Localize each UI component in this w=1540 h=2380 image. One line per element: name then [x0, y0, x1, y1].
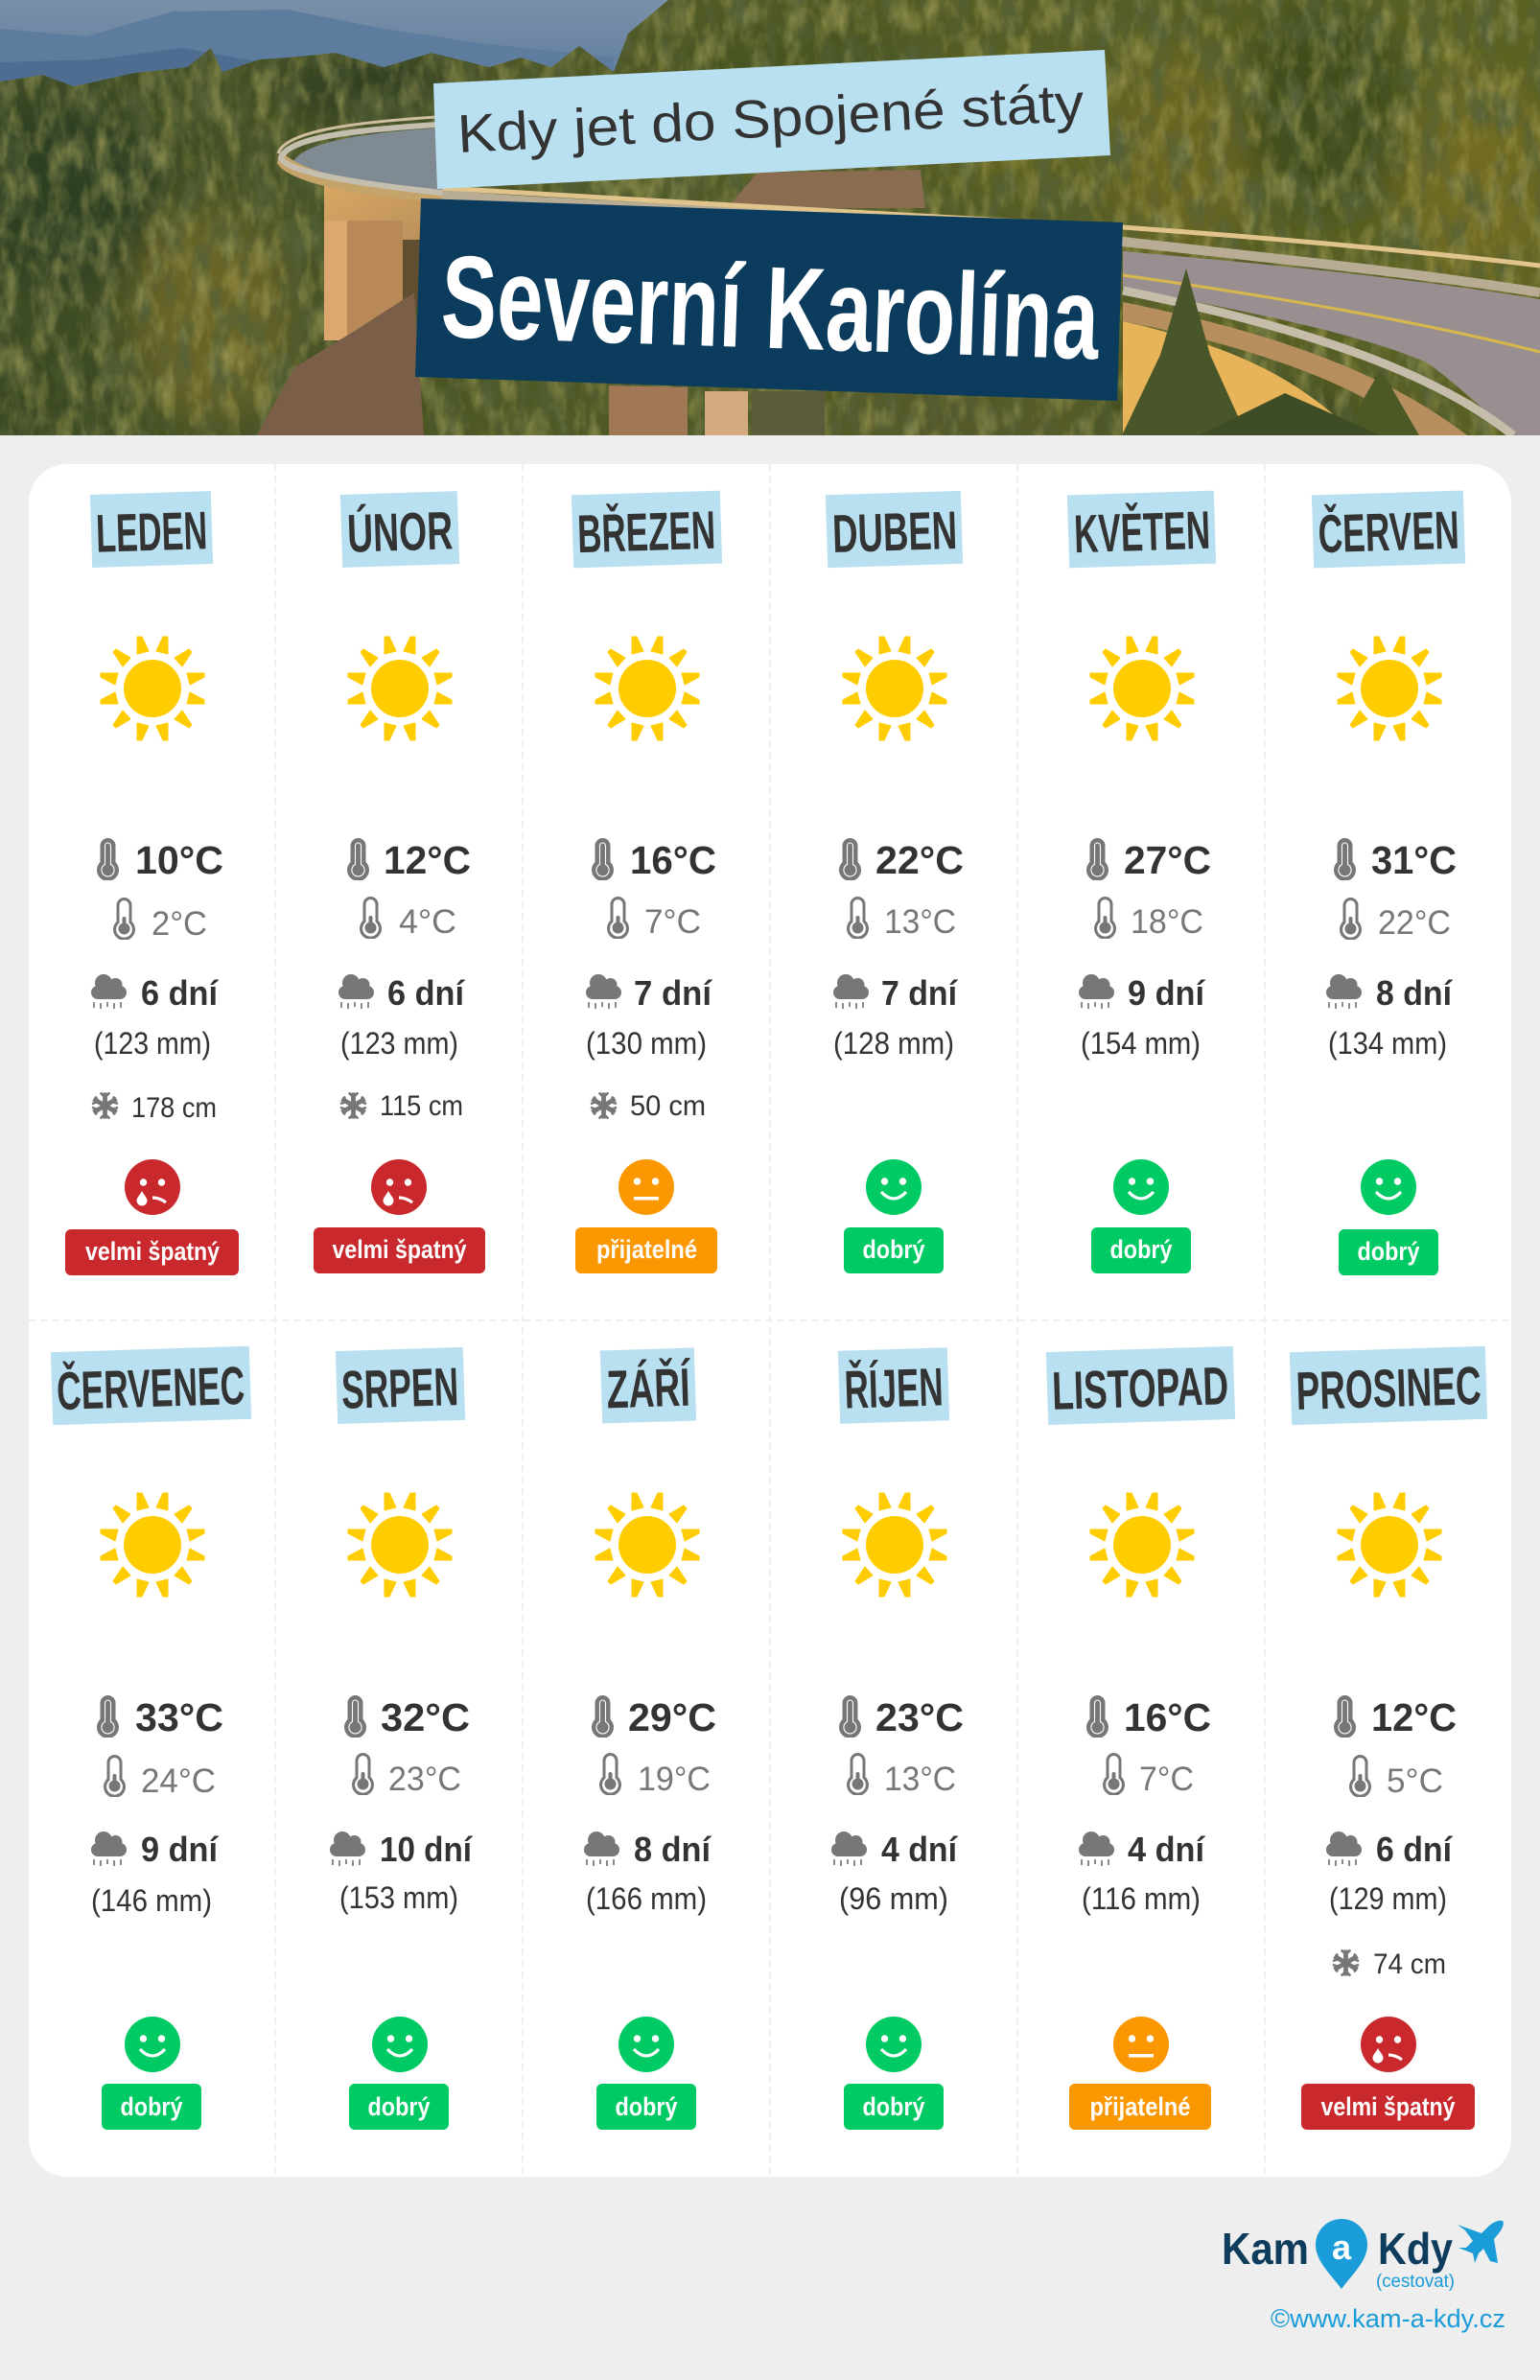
- header photo: road viaduct in forested mountains: [0, 0, 1540, 470]
- low temperature: [847, 897, 956, 941]
- precipitation: (130 mm): [586, 1026, 707, 1061]
- high temperature: 16°C: [1124, 1695, 1211, 1739]
- month: Březen: [572, 491, 722, 1273]
- rain days: [338, 973, 465, 1013]
- snow: 178 cm: [131, 1092, 217, 1124]
- rating badge: [575, 1227, 717, 1273]
- rain days: 6 dní: [141, 973, 219, 1013]
- rating badge: velmi špatný: [332, 1235, 466, 1264]
- high temperature: 12°C: [384, 838, 471, 882]
- panel: calendar card: [29, 464, 1511, 2177]
- precipitation: (129 mm): [1329, 1881, 1447, 1916]
- rain days: 6 dní: [387, 973, 465, 1013]
- rating badge: dobrý: [616, 2092, 677, 2121]
- rain days: 9 dní: [1128, 973, 1205, 1013]
- rating badge: velmi špatný: [1321, 2092, 1456, 2121]
- low temperature: [113, 898, 207, 943]
- month: Duben: [826, 491, 964, 1273]
- low temperature: [1340, 898, 1451, 942]
- month label: [340, 491, 459, 568]
- high temperature: 10°C: [135, 838, 223, 882]
- high temperature: 31°C: [1371, 838, 1457, 882]
- low temperature: 7°C: [644, 903, 701, 941]
- precipitation: (146 mm): [91, 1883, 212, 1918]
- high temperature: 33°C: [135, 1695, 223, 1739]
- icon: sun: [595, 1493, 699, 1597]
- subtitle banner: Kdy jet do Spojené státy: [455, 72, 1085, 164]
- high temperature: [1334, 1695, 1457, 1739]
- lower rail and bridge wall: [1123, 321, 1334, 433]
- precipitation: (123 mm): [340, 1026, 458, 1061]
- road surface right: [1123, 251, 1540, 435]
- high temperature: [97, 838, 223, 882]
- high temperature: [1086, 1695, 1211, 1739]
- rating badge: dobrý: [368, 2092, 430, 2121]
- rating face: [866, 2017, 922, 2072]
- rating badge: [1069, 2084, 1211, 2130]
- snow: [340, 1090, 463, 1122]
- month label: [336, 1347, 465, 1424]
- month label: LEDEN: [95, 500, 208, 564]
- rain days: [833, 973, 958, 1013]
- high temperature: [97, 1695, 223, 1739]
- rain days: 7 dní: [634, 973, 712, 1013]
- low temperature: [360, 897, 456, 941]
- month label: [1046, 1346, 1235, 1425]
- month: Únor: [314, 491, 485, 1273]
- low temperature: [599, 1753, 711, 1798]
- rating badge: [314, 1227, 485, 1273]
- icon: sun: [843, 637, 946, 740]
- rating badge: [844, 2084, 944, 2130]
- foreground trees: [1122, 268, 1247, 435]
- precipitation: (128 mm): [833, 1026, 954, 1061]
- rain days: 10 dní: [380, 1830, 473, 1869]
- icon: sun: [1338, 1493, 1441, 1597]
- low temperature: [104, 1755, 216, 1800]
- rating face: [371, 1159, 427, 1215]
- rain days: [831, 1830, 958, 1869]
- precipitation: (154 mm): [1081, 1026, 1201, 1061]
- month label: [1067, 491, 1216, 568]
- icon: sun: [348, 1493, 452, 1597]
- month: Říjen: [831, 1347, 964, 2130]
- icon: map pin: a: [1332, 2228, 1352, 2267]
- month label: [838, 1347, 949, 1424]
- icon: sun: [595, 637, 699, 740]
- icon: sun: [101, 1493, 204, 1597]
- title banner: Severní Karolína: [439, 231, 1102, 384]
- month label: KVĚTEN: [1073, 500, 1211, 564]
- low temperature: 5°C: [1387, 1762, 1443, 1800]
- icon: sun: [101, 637, 204, 740]
- snow: 74 cm: [1373, 1948, 1446, 1980]
- month label: LISTOPAD: [1051, 1355, 1229, 1421]
- road far left loop: [293, 128, 442, 190]
- rain days: 8 dní: [634, 1830, 712, 1869]
- rain days: 4 dní: [1128, 1830, 1205, 1869]
- rating face: [866, 1159, 922, 1215]
- title banner: [415, 198, 1123, 401]
- high temperature: 22°C: [875, 838, 964, 882]
- logo: Kam a Kdy: (cestovat): [1376, 2272, 1455, 2292]
- rain days: 8 dní: [1376, 973, 1453, 1013]
- precipitation: (134 mm): [1328, 1026, 1447, 1061]
- low temperature: 22°C: [1378, 904, 1451, 942]
- rock behind: [727, 170, 925, 208]
- month label: ŘÍJEN: [844, 1356, 945, 1420]
- high temperature: 32°C: [381, 1695, 470, 1739]
- month label: ČERVEN: [1318, 500, 1460, 564]
- month label: [826, 491, 963, 568]
- rating badge: přijatelné: [1089, 2092, 1191, 2121]
- icon: map pin: [1316, 2219, 1367, 2289]
- rating face: [372, 2017, 428, 2072]
- rating badge: velmi špatný: [85, 1237, 220, 1266]
- rating face: [618, 1159, 674, 1215]
- month: Srpen: [330, 1347, 473, 2130]
- rating badge: dobrý: [1358, 1237, 1419, 1266]
- month label: ÚNOR: [346, 500, 454, 564]
- low temperature: [352, 1753, 461, 1798]
- rain days: [584, 1830, 712, 1869]
- precipitation: (166 mm): [586, 1881, 707, 1916]
- month: Květen: [1067, 491, 1216, 1273]
- month: Září: [584, 1347, 716, 2130]
- rating badge: dobrý: [121, 2092, 182, 2121]
- high temperature: 27°C: [1124, 838, 1211, 882]
- low temperature: [1094, 897, 1203, 941]
- snow: 50 cm: [630, 1090, 706, 1122]
- high temperature: 23°C: [875, 1695, 964, 1739]
- rock cliff: [257, 292, 424, 435]
- high temperature: 16°C: [630, 838, 716, 882]
- high temperature: [1086, 838, 1211, 882]
- icon: plane: [1458, 2221, 1504, 2263]
- long rail behind boxes: [442, 195, 1540, 292]
- website url: ©www.kam-a-kdy.cz: [1271, 2304, 1505, 2333]
- rain days: [1326, 973, 1453, 1013]
- rain days: [1326, 1830, 1453, 1869]
- month label: SRPEN: [340, 1356, 459, 1420]
- rain days: [586, 973, 712, 1013]
- rain days: 7 dní: [881, 973, 958, 1013]
- high temperature: [1334, 838, 1457, 882]
- rating badge: [102, 2084, 201, 2130]
- month label: [600, 1347, 696, 1424]
- icon: sun: [348, 637, 452, 740]
- month: Červenec: [51, 1346, 251, 2130]
- rating face: [125, 2017, 180, 2072]
- low temperature: 19°C: [638, 1761, 711, 1798]
- low temperature: 23°C: [388, 1761, 461, 1798]
- rating badge: [1339, 1229, 1438, 1275]
- rain days: 6 dní: [1376, 1830, 1453, 1869]
- month label: [1290, 1346, 1487, 1425]
- precipitation: (153 mm): [339, 1880, 458, 1915]
- rain days: [1079, 973, 1205, 1013]
- rating badge: dobrý: [1110, 1235, 1172, 1264]
- precipitation: (116 mm): [1082, 1881, 1201, 1916]
- precipitation: (96 mm): [839, 1881, 948, 1916]
- high temperature: [344, 1695, 470, 1739]
- rating face: [1113, 2017, 1169, 2072]
- month: Listopad: [1046, 1346, 1235, 2130]
- rating badge: [349, 2084, 449, 2130]
- month label: [572, 491, 722, 568]
- high temperature: 12°C: [1371, 1695, 1457, 1739]
- rain days: [330, 1830, 473, 1869]
- rating face: [1113, 1159, 1169, 1215]
- month label: DUBEN: [831, 500, 958, 564]
- icon: sun: [1090, 637, 1194, 740]
- low temperature: [1349, 1755, 1443, 1800]
- logo: Kam a Kdy: Kam: [1222, 2224, 1309, 2274]
- high temperature: [592, 838, 716, 882]
- rating badge: dobrý: [863, 2092, 924, 2121]
- rain days: [91, 1830, 219, 1869]
- rating badge: [596, 2084, 696, 2130]
- month label: BŘEZEN: [576, 500, 716, 564]
- icon: sun: [1338, 637, 1441, 740]
- snow: [1333, 1948, 1446, 1980]
- rain days: 9 dní: [141, 1830, 219, 1869]
- low temperature: 13°C: [884, 903, 956, 941]
- month label: ČERVENEC: [56, 1355, 245, 1421]
- month label: [1312, 491, 1465, 568]
- low temperature: [1103, 1753, 1194, 1798]
- rating badge: [1091, 1227, 1191, 1273]
- rain days: [91, 973, 219, 1013]
- month: Červen: [1312, 491, 1465, 1275]
- low temperature: 24°C: [141, 1762, 216, 1800]
- rating face: [125, 1159, 180, 1215]
- icon: sun: [843, 1493, 946, 1597]
- month label: [90, 491, 213, 568]
- month label: [51, 1346, 251, 1425]
- rain days: 4 dní: [881, 1830, 958, 1869]
- icon: sun: [1090, 1493, 1194, 1597]
- low temperature: 7°C: [1139, 1761, 1194, 1798]
- precipitation: (123 mm): [94, 1026, 211, 1061]
- logo: Kam a Kdy: [1222, 2219, 1504, 2292]
- snow: [591, 1090, 706, 1122]
- snow: 115 cm: [380, 1090, 463, 1122]
- rating badge: přijatelné: [596, 1235, 697, 1264]
- month: Leden: [65, 491, 239, 1275]
- logo: Kam a Kdy: Kdy: [1378, 2224, 1453, 2274]
- bridge beam and pillars: [324, 186, 421, 240]
- rating badge: [844, 1227, 944, 1273]
- subtitle banner: [433, 50, 1110, 189]
- low temperature: [607, 897, 701, 941]
- month label: ZÁŘÍ: [606, 1357, 692, 1419]
- low temperature: 13°C: [884, 1761, 956, 1798]
- rating badge: [1301, 2084, 1475, 2130]
- rating face: [1361, 1159, 1416, 1215]
- low temperature: 4°C: [399, 903, 456, 941]
- rating face: [1361, 2017, 1416, 2072]
- rating badge: [65, 1229, 239, 1275]
- high temperature: 29°C: [628, 1695, 716, 1739]
- low temperature: 18°C: [1131, 903, 1203, 941]
- low temperature: 2°C: [152, 905, 207, 943]
- low temperature: [847, 1753, 956, 1798]
- snow: [92, 1092, 217, 1124]
- rating face: [618, 2017, 674, 2072]
- rain days: [1079, 1830, 1205, 1869]
- rating badge: dobrý: [863, 1235, 924, 1264]
- month: Prosinec: [1290, 1346, 1487, 2130]
